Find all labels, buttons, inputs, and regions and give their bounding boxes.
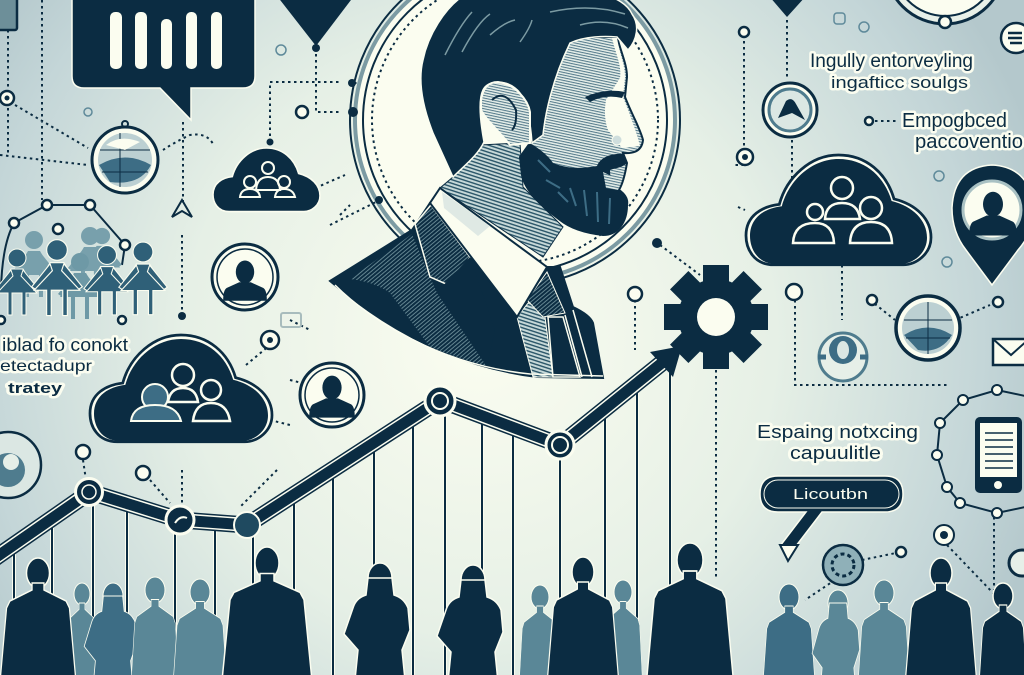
icon: top right dial bbox=[885, 0, 1005, 28]
line chart: trend line with arrow bbox=[0, 346, 682, 558]
ear bbox=[481, 82, 530, 145]
lower lapel bbox=[437, 257, 495, 365]
icon: gear bbox=[664, 265, 768, 369]
text: top right block: Ingully entorveyling bbox=[810, 51, 973, 72]
icon: top left box bbox=[0, 0, 17, 30]
hair strands bbox=[445, 8, 628, 55]
lapel bbox=[415, 205, 470, 287]
face bbox=[520, 37, 643, 235]
cloud: large right bbox=[746, 155, 931, 265]
icon: globe left bbox=[92, 121, 158, 193]
jacket shoulder hatch bbox=[350, 234, 487, 367]
text: top right block bbox=[810, 51, 973, 92]
lip bbox=[603, 172, 620, 190]
callout bubble bbox=[760, 476, 903, 561]
shirt bbox=[517, 297, 553, 377]
person circle badge upper bbox=[212, 244, 278, 310]
icon: top pin right bbox=[769, 0, 806, 17]
text: right middle block bbox=[902, 110, 1023, 153]
heading: left text block: etectadupr bbox=[0, 358, 93, 375]
silhouettes: foreground crowd bbox=[0, 543, 1024, 675]
jacket hem line bbox=[335, 285, 603, 376]
group of people with arc bbox=[0, 200, 167, 319]
icon: tablet in ring network bbox=[932, 385, 1024, 518]
collar shade bbox=[442, 192, 490, 236]
eye and brow bbox=[585, 91, 625, 102]
heading: left text block: tratey bbox=[8, 380, 63, 397]
portrait: man in profile with halo bbox=[330, 0, 680, 378]
text: expanding block: Espaing notxcing bbox=[757, 422, 918, 442]
chat bubble icon with bars bbox=[72, 0, 255, 120]
line chart: vertical bars bbox=[14, 357, 670, 675]
icon: small badge bbox=[934, 525, 954, 545]
map pin with person bbox=[952, 165, 1024, 285]
text: expanding block: capuulitle bbox=[790, 443, 881, 463]
silhouettes: background crowd bbox=[64, 577, 911, 675]
icon: coin bbox=[823, 545, 863, 585]
neck bbox=[440, 143, 563, 257]
beard bbox=[520, 143, 627, 235]
icon: ear person circle bbox=[763, 83, 817, 137]
cloud: left middle bbox=[90, 335, 272, 442]
hair bbox=[421, 0, 637, 177]
jacket bbox=[330, 203, 603, 378]
tie blade and stripes bbox=[548, 310, 592, 377]
heading: left text block: iblad fo conokt bbox=[2, 335, 128, 355]
icon: bottom left portrait circle bbox=[0, 432, 41, 498]
text: right middle block: paccoventio bbox=[915, 131, 1023, 153]
tie bbox=[527, 272, 565, 317]
heading: left text block bbox=[0, 335, 128, 397]
face highlight bbox=[605, 38, 640, 148]
text: top right block: ingafticc soulgs bbox=[831, 73, 968, 92]
person circle badge lower bbox=[300, 363, 364, 427]
text: expanding block bbox=[757, 422, 918, 463]
icon: medallion bbox=[818, 333, 868, 381]
ear detail bbox=[492, 96, 516, 130]
nose wing bbox=[612, 135, 622, 145]
text: right middle block: Empogbced bbox=[902, 110, 1007, 132]
halo rings bbox=[348, 0, 680, 285]
callout bubble: Licoutbn bbox=[793, 486, 868, 503]
icon: top pin left bbox=[277, 0, 354, 46]
icon: globe right bbox=[896, 296, 960, 360]
icon: small list circle bbox=[1001, 23, 1024, 53]
collar bbox=[430, 188, 547, 317]
cloud: small upper left bbox=[213, 148, 320, 212]
beard highlights bbox=[538, 160, 610, 224]
icon: envelope bbox=[993, 339, 1024, 365]
